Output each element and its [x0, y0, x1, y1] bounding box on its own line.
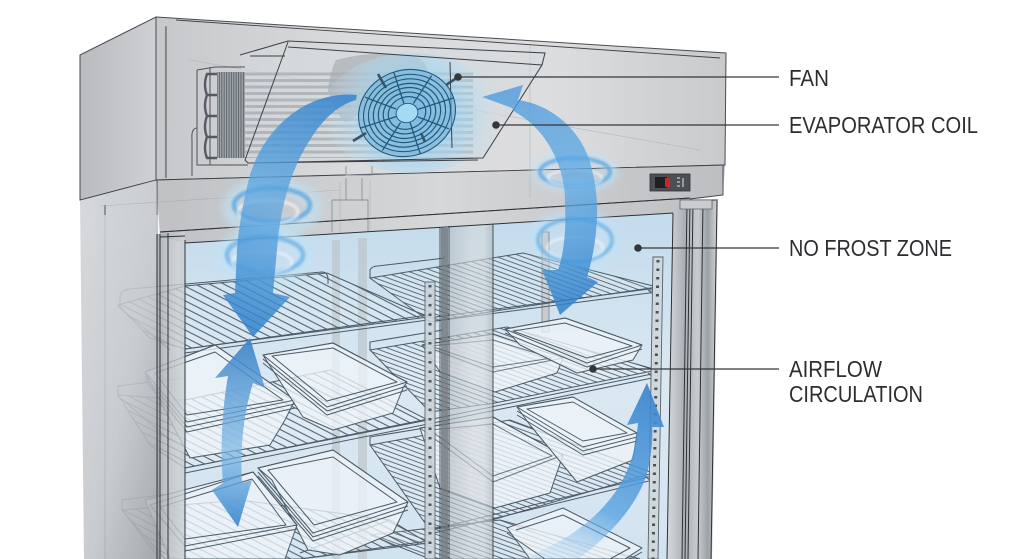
refrigerated interior — [180, 213, 673, 559]
leader: fan — [454, 73, 779, 81]
center lines — [440, 224, 493, 559]
lower side panel — [80, 180, 160, 559]
right shelf 3 — [370, 420, 653, 530]
pan: lower front — [145, 472, 297, 559]
swirl: left lower — [223, 233, 307, 277]
label: airflow circulation: CIRCULATION — [789, 381, 923, 407]
airflow arrows — [212, 85, 664, 559]
power switch — [655, 177, 667, 188]
swirl: right lower — [535, 216, 615, 264]
post body — [648, 257, 663, 559]
refrigerator cabinet — [80, 17, 726, 559]
faint interior lines — [100, 28, 700, 240]
left perforated post — [425, 282, 435, 559]
left door frame — [157, 232, 185, 559]
right door frame — [667, 200, 718, 559]
leader: airflow circulation — [589, 365, 779, 373]
fan — [347, 57, 467, 169]
label: airflow circulation: AIRFLOW — [789, 356, 882, 382]
red indicator — [665, 178, 670, 187]
label: no frost zone: NO FROST ZONE — [789, 235, 952, 261]
right shelves — [370, 253, 657, 559]
fan motor shroud — [328, 53, 428, 122]
back posts — [332, 238, 367, 559]
shelf brackets — [645, 288, 657, 484]
panel housing — [650, 174, 690, 191]
pan: lower middle — [258, 450, 408, 555]
top compartment front — [156, 17, 726, 180]
control panel — [650, 174, 690, 191]
pan: bottom right — [507, 508, 642, 559]
right shelf 1 — [370, 253, 657, 322]
arrow: lower right upward — [525, 383, 664, 559]
callout leaders — [454, 73, 779, 373]
housing outline — [240, 41, 545, 163]
right perforated post — [648, 257, 663, 559]
blue glow — [322, 53, 502, 173]
fan mount brackets — [353, 74, 458, 142]
label: fan: FAN — [789, 65, 829, 91]
coil end bends — [205, 74, 217, 158]
top compartment side — [80, 17, 156, 200]
left shelf 3 — [122, 500, 428, 559]
door hinge — [680, 200, 712, 209]
post perforations — [653, 260, 658, 559]
rails — [118, 272, 428, 559]
pan: rear lower — [420, 417, 563, 508]
drain fittings — [332, 166, 372, 232]
right storage pans — [420, 318, 642, 559]
left frame lines — [157, 233, 185, 559]
evaporator unit — [192, 41, 545, 232]
swirl: right upper — [538, 157, 612, 187]
left shelf 2 — [118, 370, 428, 468]
glass door frames — [82, 198, 718, 559]
pan: upper front — [263, 343, 407, 430]
pan: lower right — [517, 397, 637, 482]
coil fins — [217, 72, 245, 158]
coil tubes — [245, 72, 473, 158]
swirl: left upper — [230, 186, 314, 230]
post body — [425, 282, 435, 559]
post perforations — [428, 285, 432, 559]
center mullion — [449, 224, 493, 559]
arrow: fan down left side — [223, 95, 357, 337]
housing — [240, 41, 545, 163]
left shelf 1 — [118, 273, 428, 349]
horizontal band — [156, 165, 725, 243]
digital display — [677, 178, 683, 187]
interior background — [180, 213, 673, 559]
right shelf 4 — [370, 520, 640, 559]
pan: upper middle — [145, 345, 295, 458]
arrow: double headed vertical — [212, 338, 265, 527]
door top trim — [160, 198, 690, 243]
coil frame — [192, 67, 248, 176]
left shelves — [118, 272, 428, 559]
leader: evaporator coil — [492, 121, 779, 129]
left side translucent panel — [82, 215, 158, 559]
right frame lines — [667, 200, 718, 559]
right shelf 2 — [370, 327, 657, 412]
center door edge — [441, 228, 448, 559]
left storage pans — [145, 343, 408, 559]
pan: upper right — [505, 318, 642, 373]
arrow: coil return right side — [482, 85, 598, 315]
label: airflow circulation — [789, 356, 923, 407]
band outline — [80, 17, 725, 559]
airflow swirl rings — [223, 157, 615, 277]
shelf rails — [370, 258, 657, 534]
rear right post — [542, 232, 549, 332]
pan: rear middle — [422, 334, 563, 392]
label: evaporator coil: EVAPORATOR COIL — [789, 112, 978, 138]
leader: no frost zone — [634, 244, 779, 252]
